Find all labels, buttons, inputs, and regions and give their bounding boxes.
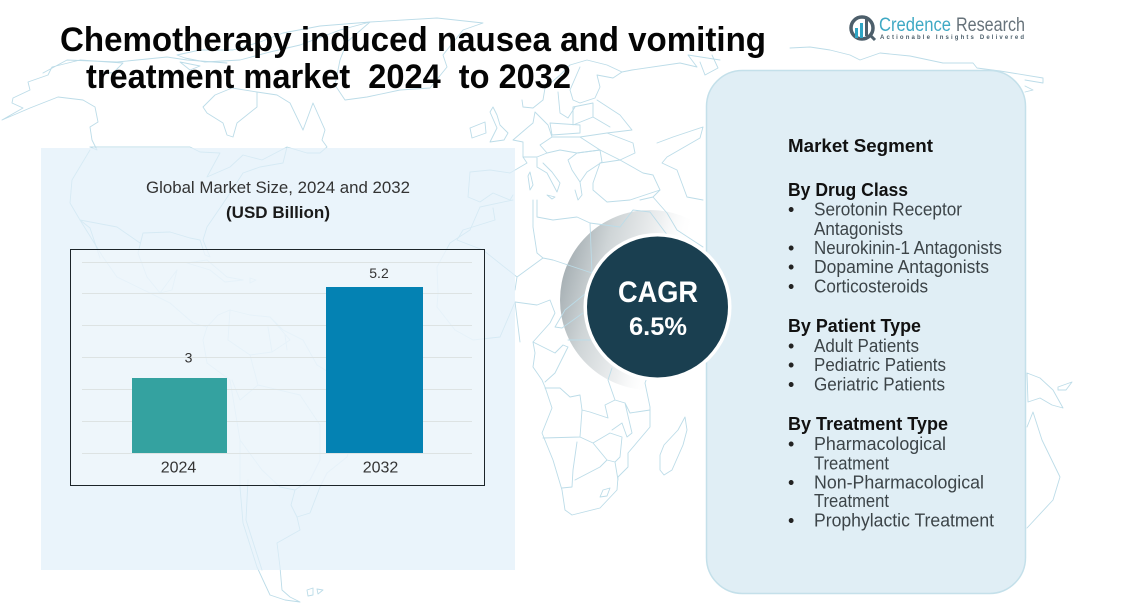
list: by drug class xyxy=(788,180,1002,296)
bar: 2024: 2024 xyxy=(161,460,196,476)
logo: Credence Research: Actionable Insights Delivered xyxy=(880,35,1024,41)
bar: 2032 xyxy=(326,265,423,476)
list: by drug class: Serotonin Receptor xyxy=(814,200,962,220)
list: by drug class: • xyxy=(788,238,794,258)
list: by drug class: Neurokinin-1 Antagonists xyxy=(814,238,1002,258)
list: by treatment type: • xyxy=(788,510,794,530)
logo: Credence Research: Research xyxy=(956,15,1025,36)
list: by drug class: By Drug Class xyxy=(788,180,908,200)
icon: logo mark xyxy=(851,17,875,40)
bar: 2032: 5.2 xyxy=(369,265,389,281)
list: by drug class: • xyxy=(788,257,794,277)
title: Chemotherapy induced nausea and vomiting xyxy=(60,21,766,59)
list: by patient type xyxy=(788,316,946,394)
title xyxy=(60,21,766,96)
panel: market segment xyxy=(706,70,1026,594)
bar: 2024: 3 xyxy=(185,350,193,366)
list: by treatment type: Pharmacological xyxy=(814,434,946,454)
CAGR badge xyxy=(584,233,732,381)
list: by patient type: • xyxy=(788,336,794,356)
chart title: (USD Billion) xyxy=(226,203,330,222)
chart title: Global Market Size, 2024 and 2032 xyxy=(146,178,410,197)
heading: market segment: Market Segment xyxy=(788,136,933,156)
bar: 2024 xyxy=(132,350,227,476)
list: by treatment type: Treatment xyxy=(814,454,889,474)
list: by patient type: • xyxy=(788,374,794,394)
list: by drug class: Antagonists xyxy=(814,219,903,239)
chart title xyxy=(146,178,410,222)
list: by drug class: • xyxy=(788,200,794,220)
list: by treatment type: • xyxy=(788,434,794,454)
list: by drug class: Corticosteroids xyxy=(814,276,928,296)
list: by treatment type xyxy=(788,414,994,530)
bar: 2032: 2032 xyxy=(363,460,398,476)
list: by treatment type: Prophylactic Treatment xyxy=(814,510,994,530)
list: by patient type: • xyxy=(788,355,794,375)
list: by treatment type: By Treatment Type xyxy=(788,414,948,434)
bar chart xyxy=(70,250,484,486)
CAGR badge: 6.5% xyxy=(629,313,687,341)
list: by treatment type: Treatment xyxy=(814,491,889,511)
CAGR badge: CAGR xyxy=(618,276,698,309)
list: by patient type: By Patient Type xyxy=(788,316,921,336)
panel: global market size xyxy=(41,148,515,570)
list: by patient type: Pediatric Patients xyxy=(814,355,946,375)
list: by drug class: • xyxy=(788,276,794,296)
logo: Credence Research: Credence xyxy=(879,15,951,36)
list: by treatment type: Non-Pharmacological xyxy=(814,472,984,492)
logo: Credence Research xyxy=(851,15,1025,41)
list: by drug class: Dopamine Antagonists xyxy=(814,257,989,277)
list: by treatment type: • xyxy=(788,472,794,492)
list: by patient type: Adult Patients xyxy=(814,336,919,356)
list: by patient type: Geriatric Patients xyxy=(814,374,945,394)
CAGR crescent shadow xyxy=(560,210,740,390)
title: treatment market 2024 to 2032 xyxy=(86,58,571,96)
